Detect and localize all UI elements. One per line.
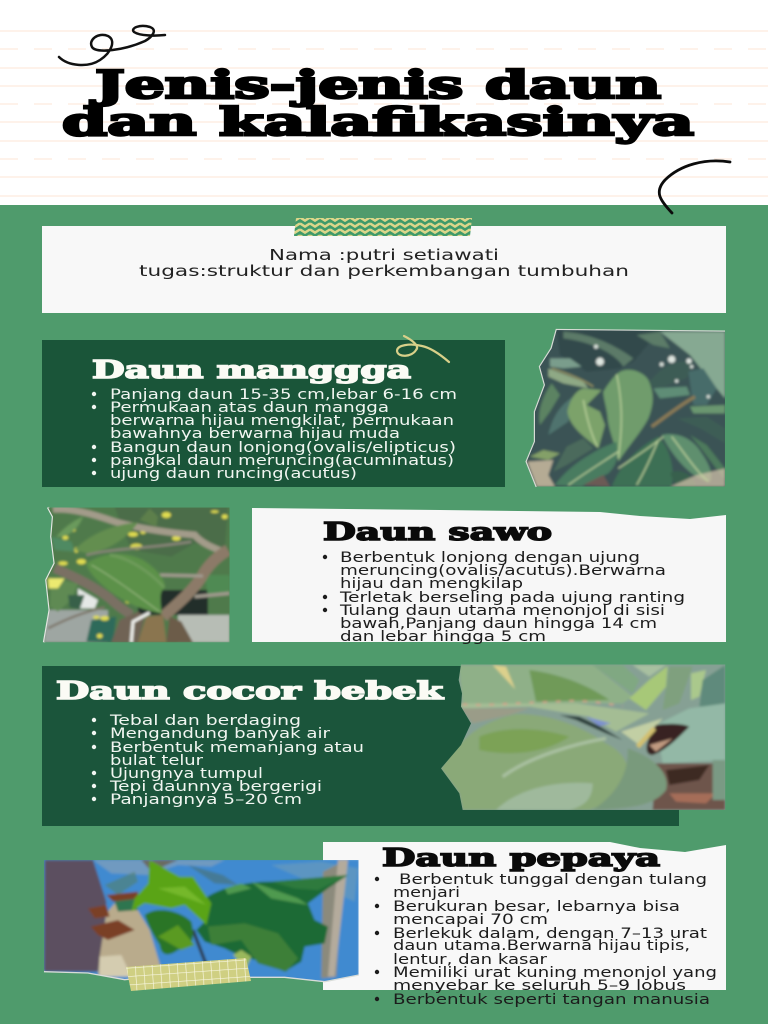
list: cocor bebek traits: Panjangnya 5–20 cm [110, 792, 302, 808]
list: cocor bebek traits [92, 713, 364, 808]
list: sawo traits: meruncing(ovalis/acutus).Berwarna [340, 563, 666, 579]
panel: daun mangga [42, 336, 505, 487]
list: pepaya traits: mencapai 70 cm [393, 912, 548, 928]
icon: curly scribble [59, 26, 165, 65]
icon: yellow squiggle [397, 336, 449, 362]
list: mangga traits: Permukaan atas daun mangga [110, 400, 389, 416]
list: cocor bebek traits: Mengandung banyak air [110, 726, 330, 742]
list: sawo traits: Berbentuk lonjong dengan ujung [340, 550, 640, 566]
list: pepaya traits: menyebar ke seluruh 5–9 lobus [393, 978, 686, 994]
list: cocor bebek traits: bulat telur [110, 753, 203, 769]
list: sawo traits: Tulang daun utama menonjol di sisi [339, 603, 665, 619]
list: mangga traits: berwarna hijau mengkilat, permukaan [110, 413, 454, 429]
title: dan kalafikasinya [62, 99, 694, 144]
heading: daun pepaya: Daun pepaya [382, 843, 660, 872]
list: pepaya traits: Memiliki urat kuning menonjol yang [393, 965, 717, 981]
panel: daun pepaya [323, 842, 726, 990]
list: pepaya traits: Berbentuk tunggal dengan tulang [399, 872, 707, 888]
panel: daun sawo [252, 508, 726, 645]
tape: zigzag [294, 218, 472, 236]
icon: curved stroke [659, 161, 730, 213]
list: mangga traits: pangkal daun meruncing(acuminatus) [110, 453, 454, 469]
title [62, 62, 694, 144]
list: cocor bebek traits: Berbentuk memanjang atau [110, 740, 364, 756]
photo: papaya tree [43, 859, 360, 982]
heading: daun sawo: Daun sawo [323, 517, 552, 546]
text: name and assignment: Nama :putri setiawati [269, 246, 499, 264]
heading: daun cocor bebek: Daun cocor bebek [56, 676, 445, 705]
list: mangga traits: bawahnya berwarna hijau muda [110, 426, 400, 442]
list: pepaya traits: daun utama.Berwarna hijau tipis, [393, 938, 690, 954]
text: name and assignment: tugas:struktur dan perkembangan tumbuhan [139, 262, 629, 280]
list: pepaya traits: Berlekuk dalam, dengan 7–13 urat [393, 926, 707, 942]
list: mangga traits: ujung daun runcing(acutus) [110, 466, 357, 482]
list: pepaya traits: Berukuran besar, lebarnya bisa [393, 899, 680, 915]
text: name and assignment [139, 246, 629, 280]
list: sawo traits: hijau dan mengkilap [340, 576, 523, 592]
photo: cocor bebek leaves [439, 663, 728, 812]
photo: sapodilla tree [43, 507, 231, 643]
list: mangga traits: Bangun daun lonjong(ovalis/elipticus) [110, 440, 456, 456]
list: pepaya traits: lentur, dan kasar [393, 952, 547, 968]
heading: daun manggga: Daun manggga [92, 355, 411, 384]
list: sawo traits: Terletak berseling pada ujung ranting [339, 590, 685, 606]
photo: mango leaves [525, 328, 727, 488]
list: pepaya traits: menjari [393, 885, 460, 901]
tape: yellow grid [126, 958, 251, 991]
panel: name note [42, 218, 726, 313]
list: sawo traits: bawah,Panjang daun hingga 14 cm [340, 616, 657, 632]
list: cocor bebek traits: Tebal dan berdaging [109, 713, 301, 729]
list: mangga traits: Panjang daun 15-35 cm,lebar 6-16 cm [110, 387, 457, 403]
list: pepaya traits [375, 872, 717, 1008]
panel: daun cocor bebek [42, 666, 679, 826]
title: Jenis-jenis daun [90, 62, 661, 107]
list: cocor bebek traits: Ujungnya tumpul [110, 766, 263, 782]
list: pepaya traits: Berbentuk seperti tangan manusia [393, 992, 710, 1008]
header band with ruled lines [0, 0, 768, 205]
list: sawo traits [323, 550, 685, 645]
list: cocor bebek traits: Tepi daunnya bergerigi [109, 779, 322, 795]
list: sawo traits: dan lebar hingga 5 cm [340, 629, 546, 645]
list: mangga traits [92, 387, 457, 482]
